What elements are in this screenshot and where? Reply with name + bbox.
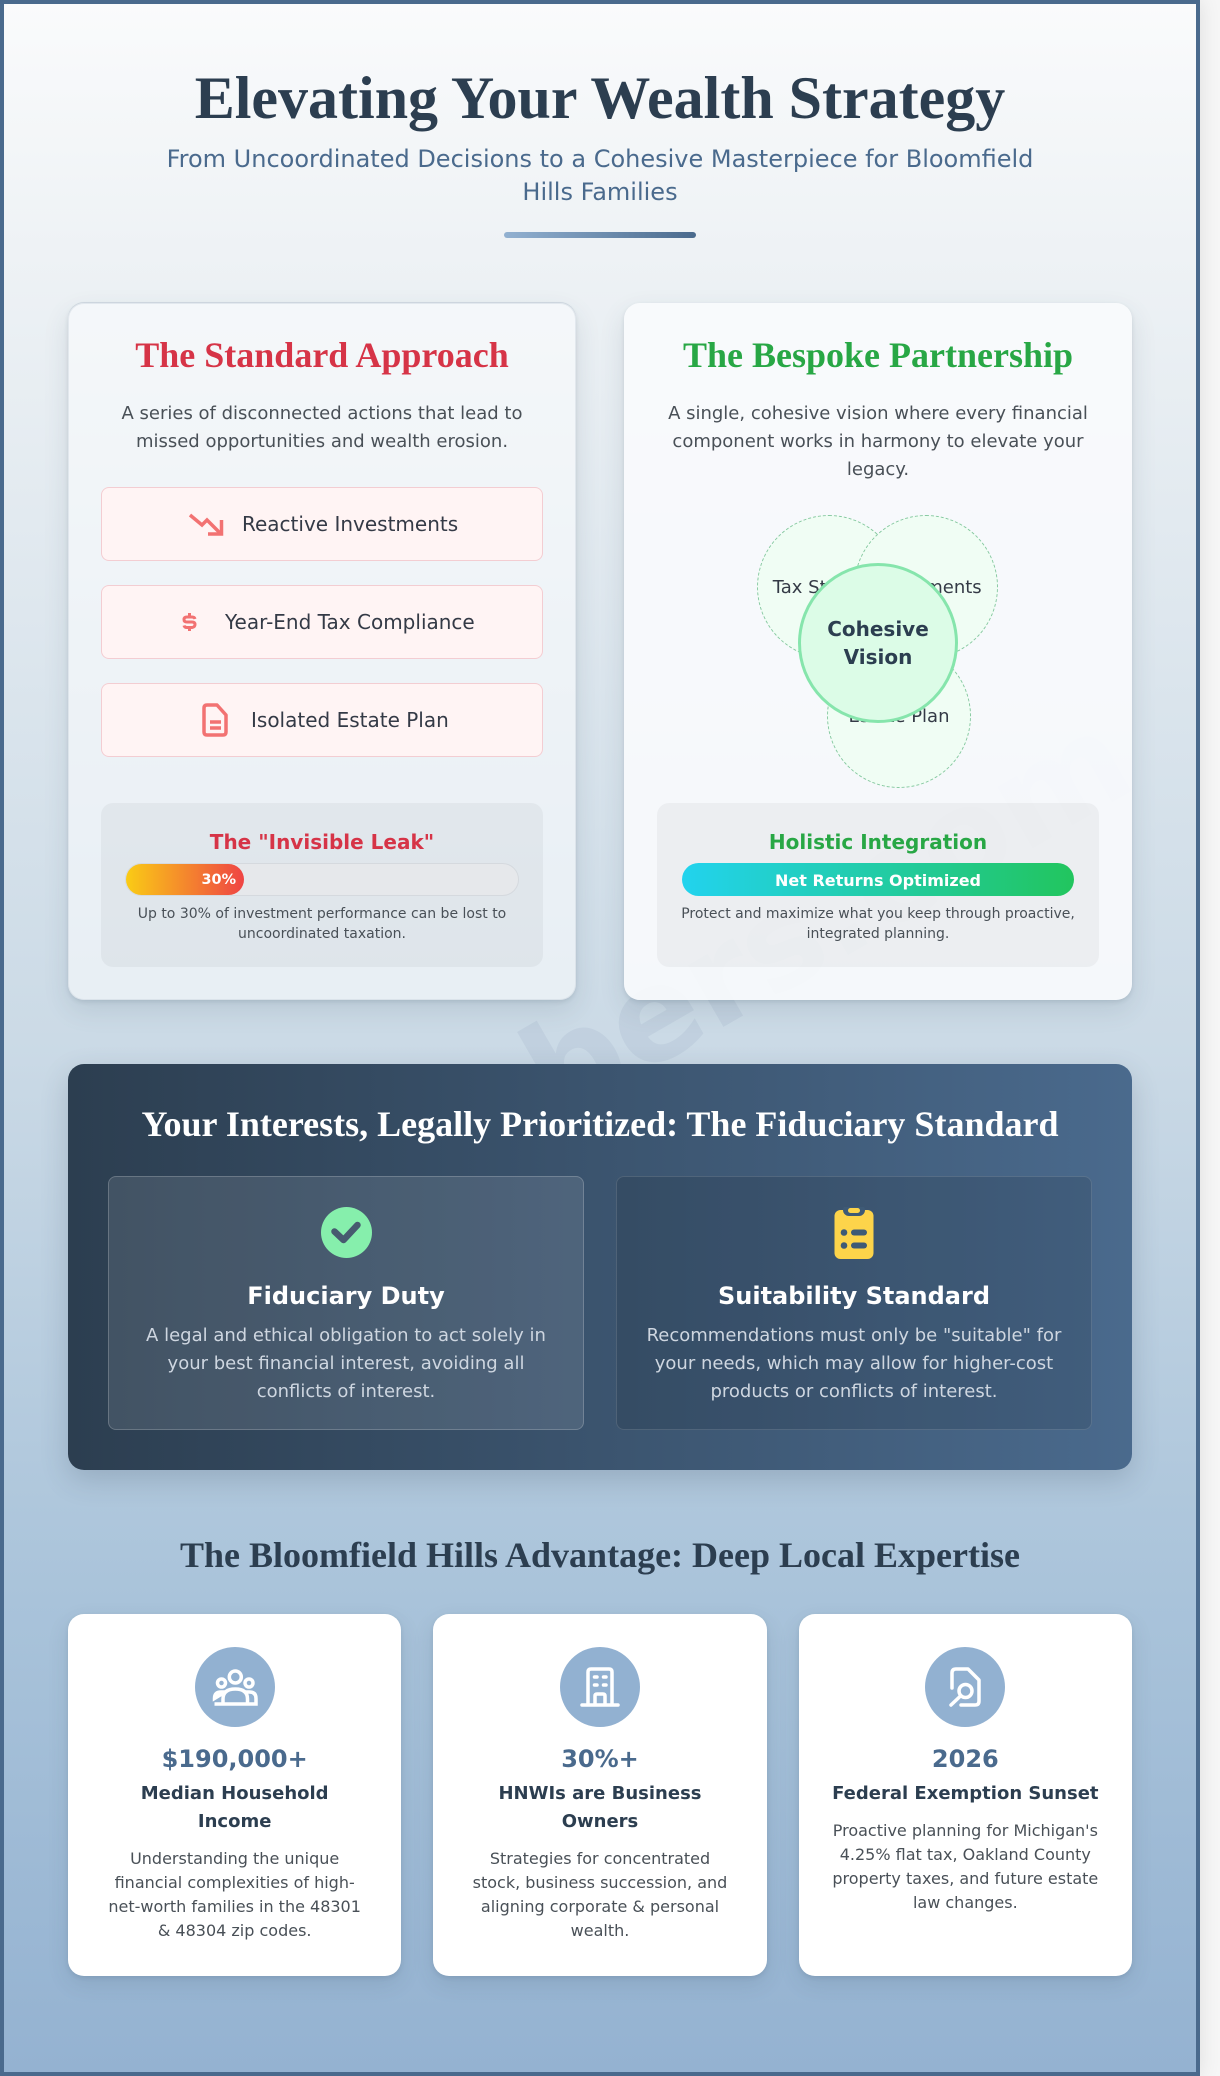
heading: The Standard Approach <box>135 335 509 375</box>
stat text: financial complexities of high- <box>115 1873 355 1892</box>
stat card: business owners <box>433 1614 767 1976</box>
card: suitability standard <box>616 1176 1092 1430</box>
callout: holistic integration <box>657 803 1099 967</box>
venn centre: cohesive vision: Vision <box>844 645 912 669</box>
venn centre: cohesive vision <box>798 563 958 723</box>
stat text <box>832 1821 1098 1912</box>
stat label: Federal Exemption Sunset <box>832 1783 1099 1804</box>
description: A single, cohesive vision where every financial <box>668 403 1088 424</box>
panel: the bespoke partnership <box>624 303 1132 1000</box>
stat text <box>473 1849 727 1940</box>
callout: invisible leak <box>101 803 543 967</box>
description: legacy. <box>847 459 909 480</box>
card text: conflicts of interest. <box>257 1380 435 1402</box>
callout heading: Holistic Integration <box>769 830 987 854</box>
card text <box>647 1324 1062 1402</box>
item: isolated estate plan: Isolated Estate Plan <box>251 708 449 732</box>
panel: the standard approach <box>68 303 576 1000</box>
description: missed opportunities and wealth erosion. <box>136 431 508 452</box>
stat text: Understanding the unique <box>130 1849 339 1868</box>
card text: Recommendations must only be "suitable" for <box>647 1324 1061 1346</box>
stat card: federal exemption <box>799 1614 1132 1976</box>
stat label <box>141 1783 329 1832</box>
stat label: Income <box>198 1811 271 1832</box>
callout caption: uncoordinated taxation. <box>238 926 406 942</box>
subtitle: From Uncoordinated Decisions to a Cohesive Masterpiece for Bloomfield <box>167 145 1033 173</box>
venn circle: tax strategy <box>757 515 901 659</box>
icon: building <box>560 1647 640 1727</box>
subtitle <box>167 145 1033 206</box>
venn circle: estate plan <box>827 644 971 788</box>
stat text: & 48304 zip codes. <box>158 1921 311 1940</box>
stat label: Owners <box>562 1811 638 1832</box>
venn centre: cohesive vision: Cohesive <box>827 617 929 641</box>
gradient bar: Net Returns Optimized <box>775 871 981 890</box>
item: year-end tax compliance: Year-End Tax Compliance <box>225 610 475 634</box>
item: reactive investments: Reactive Investments <box>242 512 458 536</box>
section heading: The Bloomfield Hills Advantage: Deep Local Expertise <box>180 1535 1020 1575</box>
callout caption: Protect and maximize what you keep through proactive, <box>681 906 1075 922</box>
callout heading: The "Invisible Leak" <box>210 830 434 854</box>
callout caption: integrated planning. <box>807 926 949 942</box>
header divider bar <box>504 232 696 238</box>
venn circle: investments: Investments <box>870 577 982 598</box>
title: Elevating Your Wealth Strategy <box>195 65 1005 131</box>
item: year-end tax compliance <box>101 585 543 659</box>
icon: clipboard <box>834 1208 874 1259</box>
stat value: $190,000+ <box>162 1744 308 1772</box>
item: isolated estate plan <box>101 683 543 757</box>
stat label: HNWIs are Business <box>498 1783 702 1804</box>
stat text: Strategies for concentrated <box>490 1849 710 1868</box>
icon: people <box>195 1647 275 1727</box>
stat card: median income <box>68 1614 401 1976</box>
stat value: 30%+ <box>561 1744 639 1772</box>
progress fill <box>126 864 244 895</box>
card text <box>146 1324 546 1402</box>
panel: fiduciary standard <box>68 1064 1132 1470</box>
icon: document search <box>925 1647 1005 1727</box>
card title: Fiduciary Duty <box>247 1282 445 1310</box>
icon: check circle <box>321 1207 372 1258</box>
heading: The Bespoke Partnership <box>683 335 1073 375</box>
stat text: stock, business succession, and <box>473 1873 727 1892</box>
stat text <box>108 1849 361 1940</box>
card title: Suitability Standard <box>718 1282 990 1310</box>
card: fiduciary duty <box>108 1176 584 1430</box>
header <box>167 65 1033 238</box>
description <box>121 403 523 452</box>
venn circle: estate plan: Estate Plan <box>848 706 950 727</box>
stat text: law changes. <box>913 1893 1018 1912</box>
item: reactive investments <box>101 487 543 561</box>
stat text: 4.25% flat tax, Oakland County <box>840 1845 1091 1864</box>
venn circle: tax strategy: Tax Strategy <box>773 577 885 598</box>
page frame: bers.com <box>496 681 1156 1150</box>
subtitle: Hills Families <box>522 178 678 206</box>
description <box>668 403 1088 480</box>
callout caption <box>681 906 1075 942</box>
card text: products or conflicts of interest. <box>710 1380 998 1402</box>
card text: your needs, which may allow for higher-cost <box>655 1352 1053 1374</box>
card text: A legal and ethical obligation to act solely in <box>146 1324 546 1346</box>
description: A series of disconnected actions that lead to <box>121 403 523 424</box>
heading: Your Interests, Legally Prioritized: The Fiduciary Standard <box>142 1104 1058 1144</box>
stat text: property taxes, and future estate <box>832 1869 1098 1888</box>
stat text: Proactive planning for Michigan's <box>833 1821 1098 1840</box>
callout caption: Up to 30% of investment performance can be lost to <box>138 906 506 922</box>
stat value: 2026 <box>932 1744 999 1772</box>
stat text: net-worth families in the 48301 <box>108 1897 361 1916</box>
stat text: wealth. <box>571 1921 629 1940</box>
progress fill: 30% <box>202 872 236 888</box>
venn circle: investments <box>854 515 998 659</box>
description: component works in harmony to elevate your <box>672 431 1084 452</box>
stat label: Median Household <box>141 1783 329 1804</box>
progress bar: 30% <box>125 863 519 896</box>
stat label <box>498 1783 702 1832</box>
card text: your best financial interest, avoiding all <box>168 1352 524 1374</box>
gradient bar <box>682 863 1074 896</box>
callout caption <box>138 906 506 942</box>
stat text: aligning corporate & personal <box>481 1897 719 1916</box>
